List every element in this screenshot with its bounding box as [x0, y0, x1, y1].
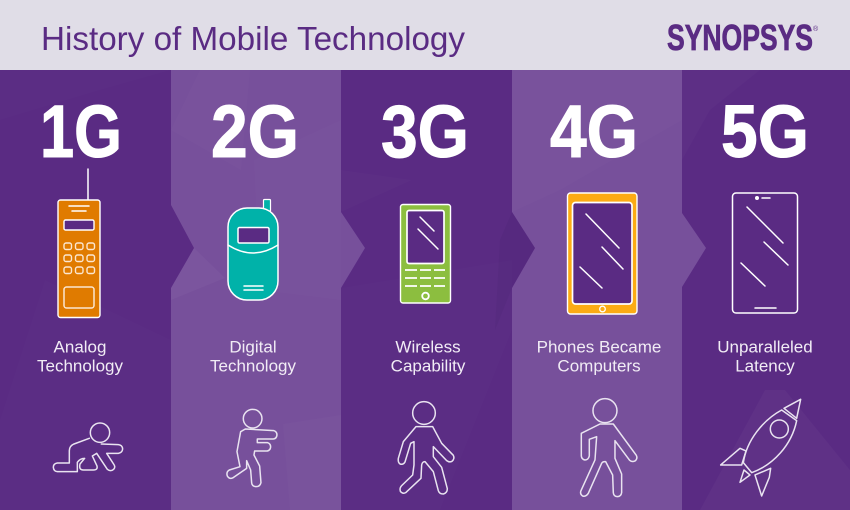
heading: 2G: 2G: [211, 90, 299, 173]
label: Wireless Capability: Capability: [391, 356, 466, 376]
icon: toddler walking with outstretched arms: [227, 409, 277, 487]
icon: digital flip phone: [228, 200, 278, 300]
label: Phones Became Computers: Phones Became: [537, 338, 661, 356]
heading: 3G: 3G: [381, 90, 469, 173]
column: 5G: [717, 90, 813, 496]
icon: walking child: [398, 402, 454, 494]
column: 2G: [210, 90, 299, 487]
heading: 1G: 1G: [40, 90, 122, 173]
label: Digital Technology: Technology: [210, 356, 296, 376]
panel: 2G background with chevron: [171, 70, 365, 510]
panel: 1G background with chevron: [0, 70, 194, 510]
panel: 3G background with chevron: [341, 70, 535, 510]
panel: 4G background with chevron: [512, 70, 706, 510]
label: Wireless Capability: Wireless: [395, 338, 461, 356]
logo: Synopsys: ®: [813, 25, 819, 33]
label: Unparalleled Latency: Unparalleled: [717, 338, 813, 356]
column: 1G: [37, 90, 123, 472]
icon: outline smartphone: [732, 193, 798, 313]
icon: rocket: [721, 399, 801, 496]
label: Analog Technology: Technology: [37, 356, 123, 376]
icon: green keypad phone: [400, 204, 450, 303]
panel: 5G background: [682, 70, 850, 510]
column: 3G: [381, 90, 469, 494]
title: History of Mobile Technology: [41, 20, 466, 57]
heading: 4G: 4G: [550, 90, 638, 173]
icon: walking person: [581, 399, 637, 497]
label: Analog Technology: Analog: [54, 338, 106, 356]
header band: [0, 0, 850, 70]
icon: orange smartphone: [568, 193, 637, 314]
icon: analog brick phone: [58, 169, 100, 318]
label: Phones Became Computers: Computers: [557, 356, 641, 376]
label: Digital Technology: Digital: [229, 338, 277, 356]
column: 4G: [537, 90, 661, 497]
icon: crawling baby: [53, 423, 123, 472]
facet: dark shading beside 3G chevron: [495, 212, 535, 330]
label: Unparalleled Latency: Latency: [735, 356, 795, 376]
heading: 5G: 5G: [721, 90, 809, 173]
